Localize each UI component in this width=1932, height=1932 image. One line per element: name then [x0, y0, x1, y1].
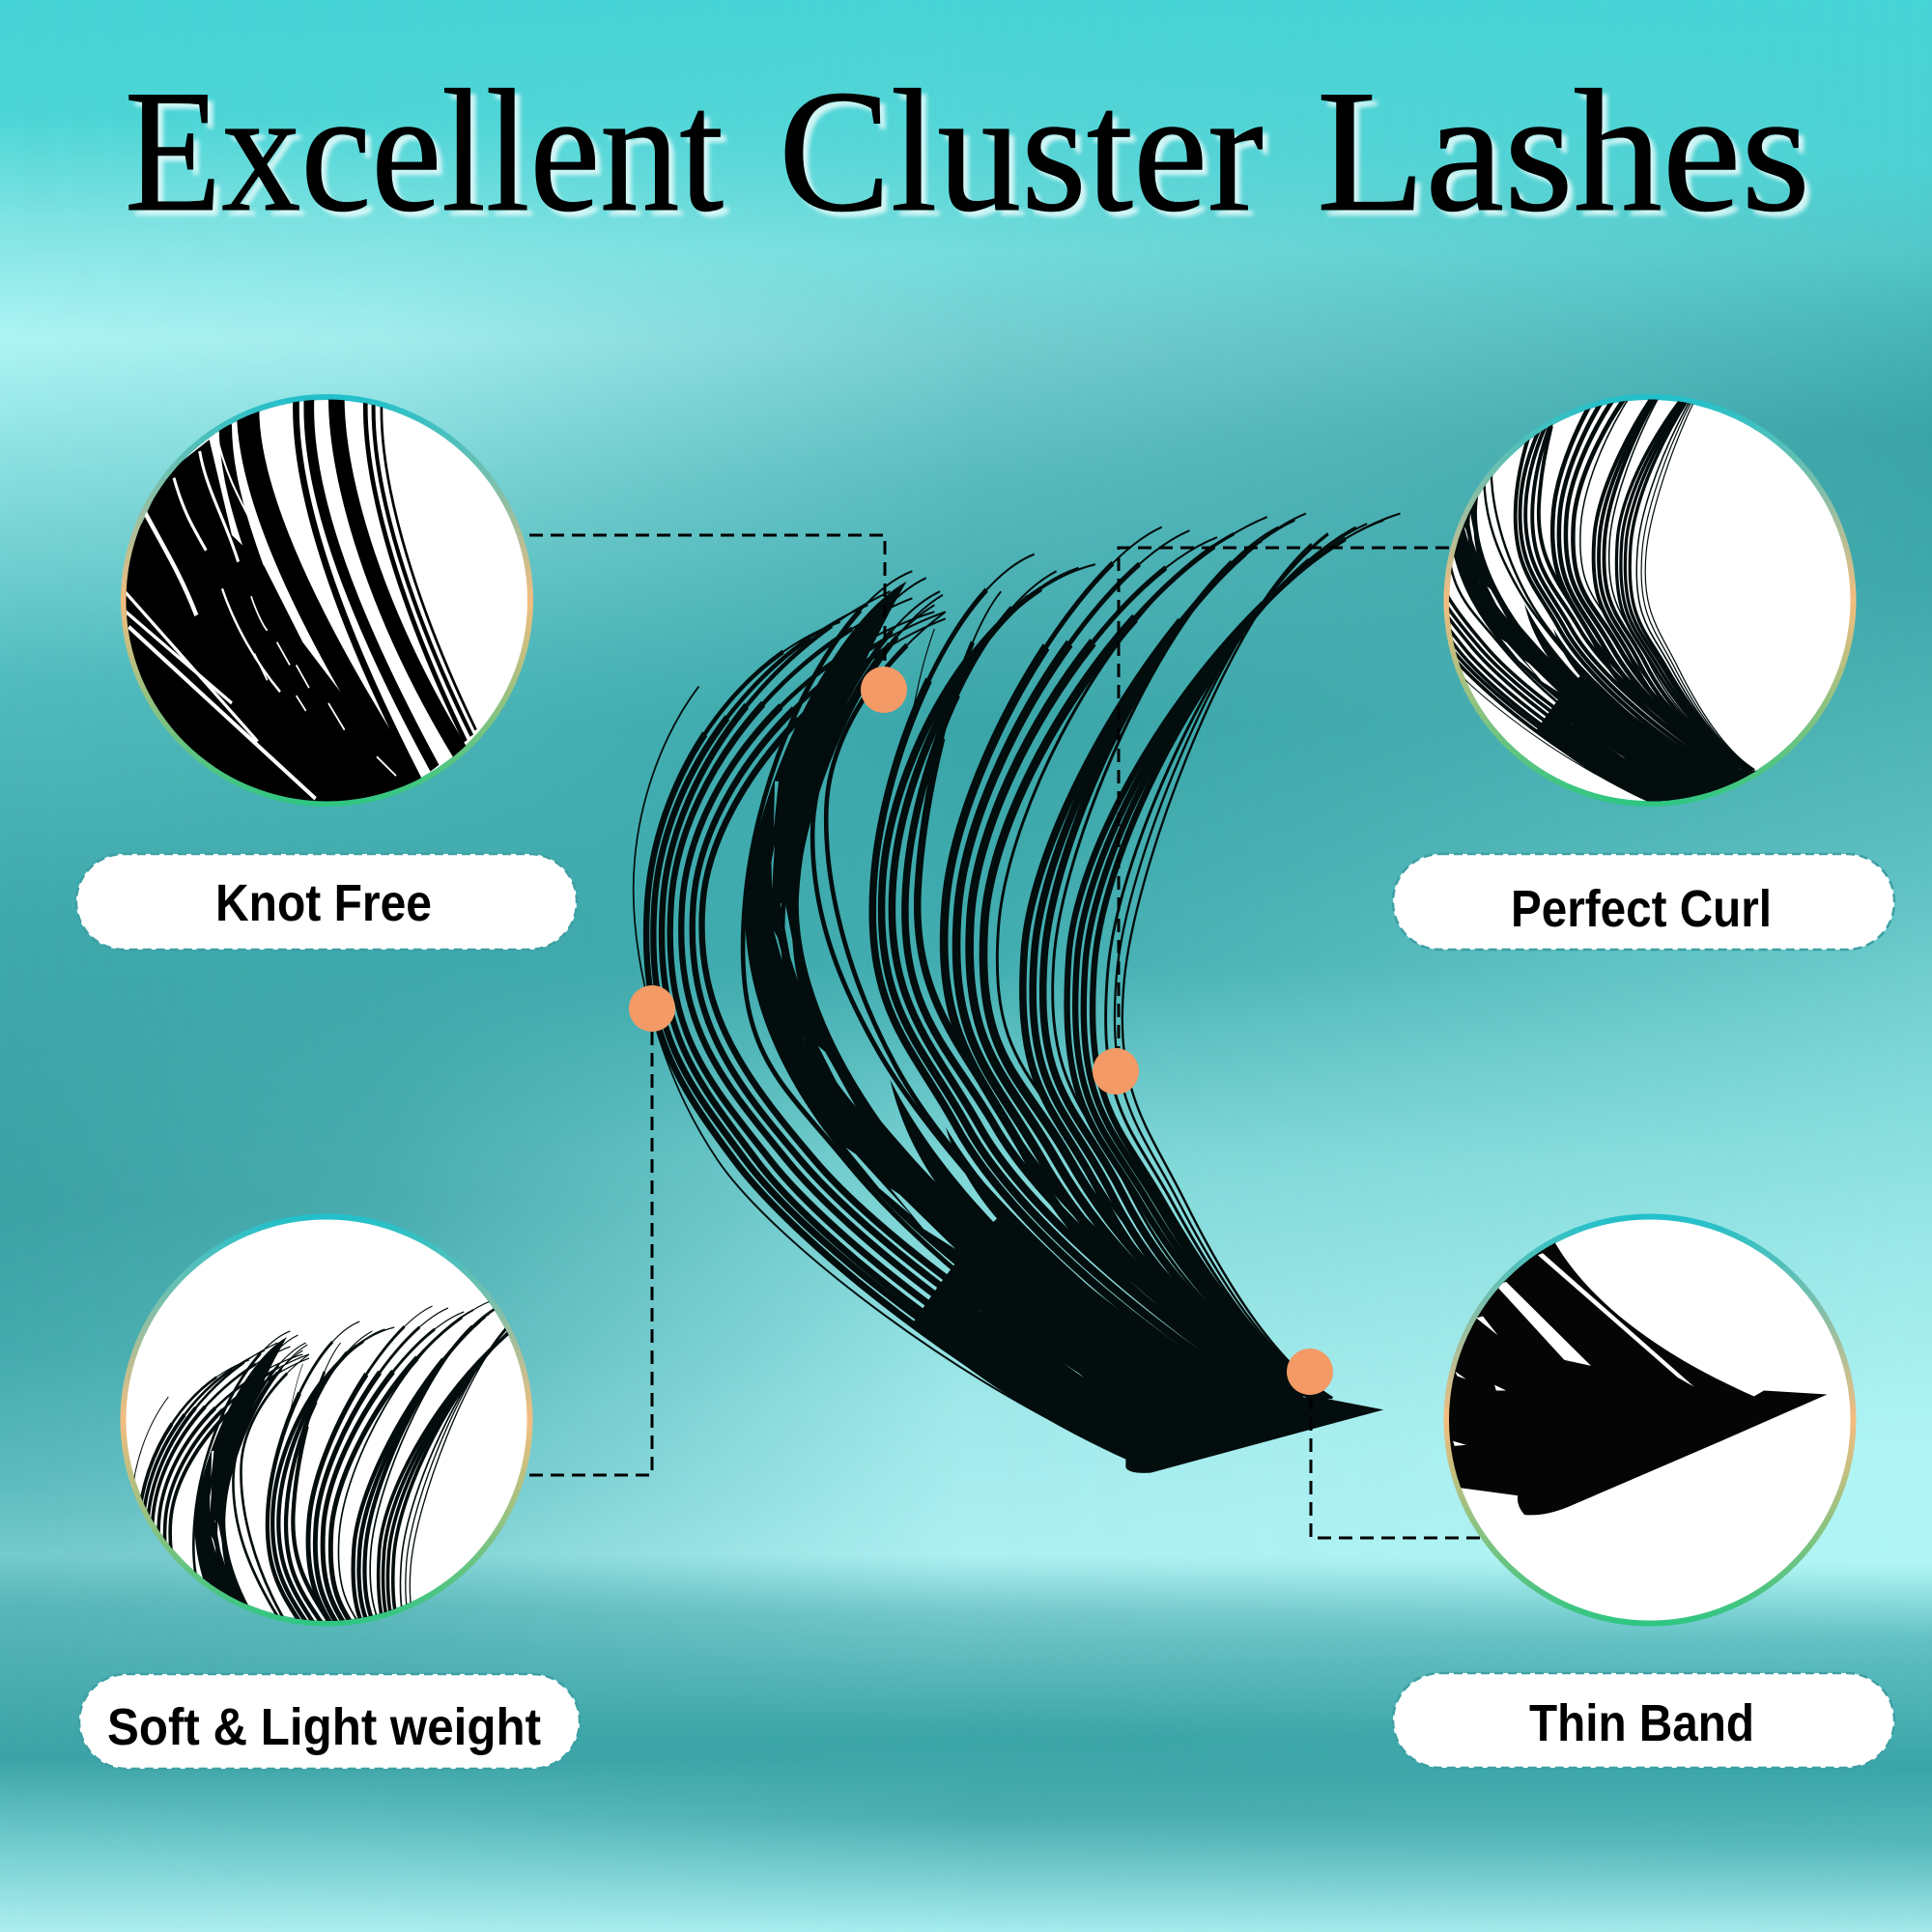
- callout connector: Soft and Light weight: [526, 1032, 652, 1475]
- panel: Thin Band magnified circle: [1438, 1217, 1853, 1623]
- label pill: Knot Free: Knot Free: [215, 874, 432, 932]
- marker dot: Thin Band: [1287, 1349, 1333, 1395]
- title: Lashes: [1317, 55, 1810, 248]
- label pill: Soft and Light weight: Soft & Light weight: [107, 1698, 541, 1756]
- marker dot: Knot Free: [861, 667, 907, 713]
- callout connector: Perfect Curl: [1119, 548, 1449, 1048]
- label pill: Perfect Curl: [1393, 854, 1894, 950]
- title: Excellent: [130, 61, 729, 254]
- label pill: Thin Band: [1393, 1673, 1894, 1768]
- title: [125, 55, 1816, 254]
- marker dot: Perfect Curl: [1093, 1048, 1139, 1094]
- callout connector: Thin Band: [1311, 1396, 1482, 1538]
- title: Lashes: [1322, 61, 1816, 254]
- label pill: Knot Free: [76, 854, 577, 950]
- title: Excellent: [125, 55, 724, 248]
- panel: Soft and Light weight magnified circle: [120, 1213, 533, 1627]
- marker dot: Soft and Light weight: [629, 985, 675, 1032]
- panel: Knot Free magnified circle: [116, 397, 530, 810]
- main lash cluster illustration: [634, 514, 1401, 1473]
- title: Cluster: [779, 55, 1264, 248]
- label pill: Thin Band: Thin Band: [1529, 1694, 1754, 1752]
- title: Cluster: [784, 61, 1269, 254]
- label pill: Perfect Curl: Perfect Curl: [1511, 880, 1772, 938]
- callout connector: Knot Free: [529, 535, 885, 668]
- label pill: Soft and Light weight: [79, 1674, 580, 1769]
- panel: Perfect Curl magnified circle: [1443, 394, 1857, 807]
